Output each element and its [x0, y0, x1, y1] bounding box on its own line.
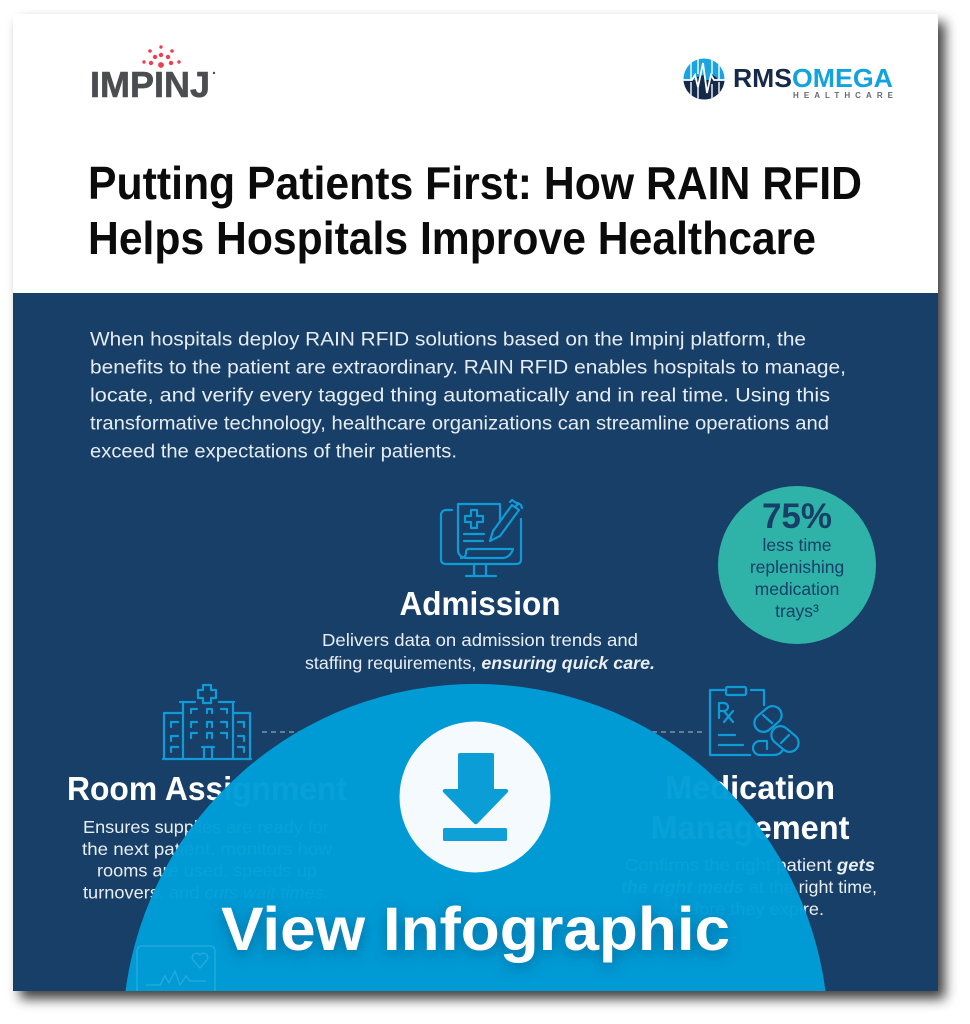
text: Room Assignment description: Ensures supplies are ready for [83, 817, 329, 837]
heading: Admission: Admission [400, 585, 560, 622]
connector: hospital to centre [262, 731, 302, 733]
logo: RMS Omega Healthcare: OMEGA [792, 63, 893, 93]
icon: prescription clipboard and pills [710, 687, 802, 756]
text: Admission description: staffing requirements, ensuring quick care. [305, 653, 655, 673]
icon: faint patient monitor [137, 946, 215, 991]
callout: 75 percent stat [718, 486, 876, 644]
callout: 75 percent stat: trays³ [775, 601, 819, 621]
logo: RMS Omega Healthcare: RMS [733, 63, 792, 93]
logo: Impinj: IMPINJ [90, 64, 210, 105]
icon: download button [400, 722, 550, 872]
call to action: View Infographic: View Infographic [221, 895, 730, 963]
text: Room Assignment description [82, 817, 332, 902]
title: Putting Patients First: How RAIN RFID [88, 157, 862, 209]
logo: RMS Omega Healthcare [684, 58, 893, 100]
icon: admission monitor and form [441, 500, 522, 576]
title [88, 157, 862, 264]
text: Room Assignment description: rooms are used, speeds up [97, 860, 317, 880]
title: Helps Hospitals Improve Healthcare [88, 212, 816, 264]
overlay circle [126, 684, 826, 991]
intro paragraph [90, 328, 846, 462]
heading: Medication Management [650, 769, 850, 846]
text: Medication description: Confirms the right patient gets [625, 855, 875, 875]
intro paragraph: When hospitals deploy RAIN RFID solutions based on the Impinj platform, the [90, 328, 806, 350]
heading: Room Assignment: Room Assignment [67, 770, 347, 807]
heading: Medication Management: Management [650, 809, 850, 846]
text: Admission description [305, 630, 655, 673]
intro paragraph: benefits to the patient are extraordinary. RAIN RFID enables hospitals to manage, [90, 356, 846, 378]
text: Room Assignment description: turnovers, and cuts wait times. [83, 882, 329, 902]
callout: 75 percent stat: 75% [762, 497, 832, 536]
text: Medication description [621, 855, 877, 919]
intro paragraph: exceed the expectations of their patients. [90, 440, 457, 462]
callout: 75 percent stat: medication [755, 579, 839, 599]
text: Room Assignment description: the next patient, monitors how [82, 839, 332, 859]
callout: 75 percent stat: less time [762, 535, 832, 555]
icon: hospital [163, 685, 251, 759]
connector: medication to centre [652, 731, 702, 733]
text: Admission description: Delivers data on admission trends and [322, 630, 638, 650]
intro paragraph: transformative technology, healthcare organizations can streamline operations and [90, 412, 829, 434]
download overlay [126, 684, 826, 991]
intro paragraph: locate, and verify every tagged thing automatically and in real time. Using this [90, 384, 830, 406]
heading: Medication Management: Medication [665, 769, 835, 806]
text: Medication description: the right meds at the right time, [621, 877, 877, 897]
logo: RMS Omega Healthcare: HEALTHCARE [793, 91, 894, 100]
logo: Impinj [90, 45, 215, 105]
callout: 75 percent stat: replenishing [750, 557, 844, 577]
navy content panel [13, 293, 938, 991]
text: Medication description: before they expire. [674, 899, 824, 919]
